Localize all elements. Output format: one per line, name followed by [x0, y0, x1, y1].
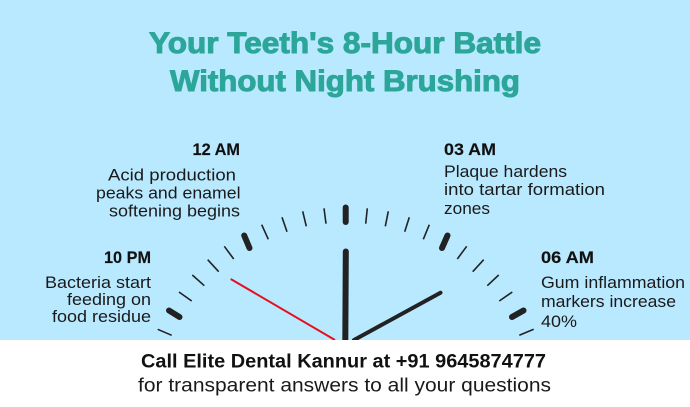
footer call to action: for transparent answers to all your questions	[138, 376, 551, 396]
text block: 12 AM: Acid production	[108, 166, 236, 185]
text block: 06 AM: markers increase	[541, 292, 676, 311]
title	[149, 27, 541, 98]
text block: 06 AM: 40%	[541, 312, 577, 331]
text block: 06 AM: Gum inflammation	[541, 273, 685, 292]
text block: 12 AM: 12 AM	[192, 140, 240, 159]
footer call to action: Call Elite Dental Kannur at +91 9645874777	[141, 352, 546, 372]
text block: 10 PM	[45, 248, 151, 326]
footer call to action	[138, 352, 551, 396]
text block: 10 PM: food residue	[52, 307, 151, 326]
clock hands	[231, 252, 440, 342]
text block: 06 AM	[541, 248, 685, 331]
text block: 10 PM: 10 PM	[104, 248, 151, 267]
title: Without Night Brushing	[170, 65, 520, 98]
text block: 12 AM	[96, 140, 240, 221]
text block: 10 PM: Bacteria start	[45, 273, 151, 292]
text block: 03 AM: 03 AM	[444, 140, 496, 159]
title: Your Teeth's 8-Hour Battle	[149, 27, 541, 60]
text block: 12 AM: peaks and enamel	[96, 183, 240, 202]
text block: 03 AM	[444, 140, 605, 218]
black minute hand	[342, 252, 349, 342]
text block: 12 AM: softening begins	[109, 202, 240, 221]
text block: 03 AM: into tartar formation	[444, 180, 605, 199]
text block: 03 AM: Plaque hardens	[444, 162, 567, 181]
text block: 03 AM: zones	[444, 199, 490, 218]
text block: 10 PM: feeding on	[67, 290, 151, 309]
panel: white footer	[0, 340, 690, 407]
minor minute ticks	[158, 208, 534, 335]
chart: clock dial ticks	[158, 208, 534, 335]
major hour ticks	[169, 208, 524, 317]
red second hand	[231, 279, 335, 340]
black hour hand	[354, 293, 440, 340]
text block: 06 AM: 06 AM	[541, 248, 594, 267]
